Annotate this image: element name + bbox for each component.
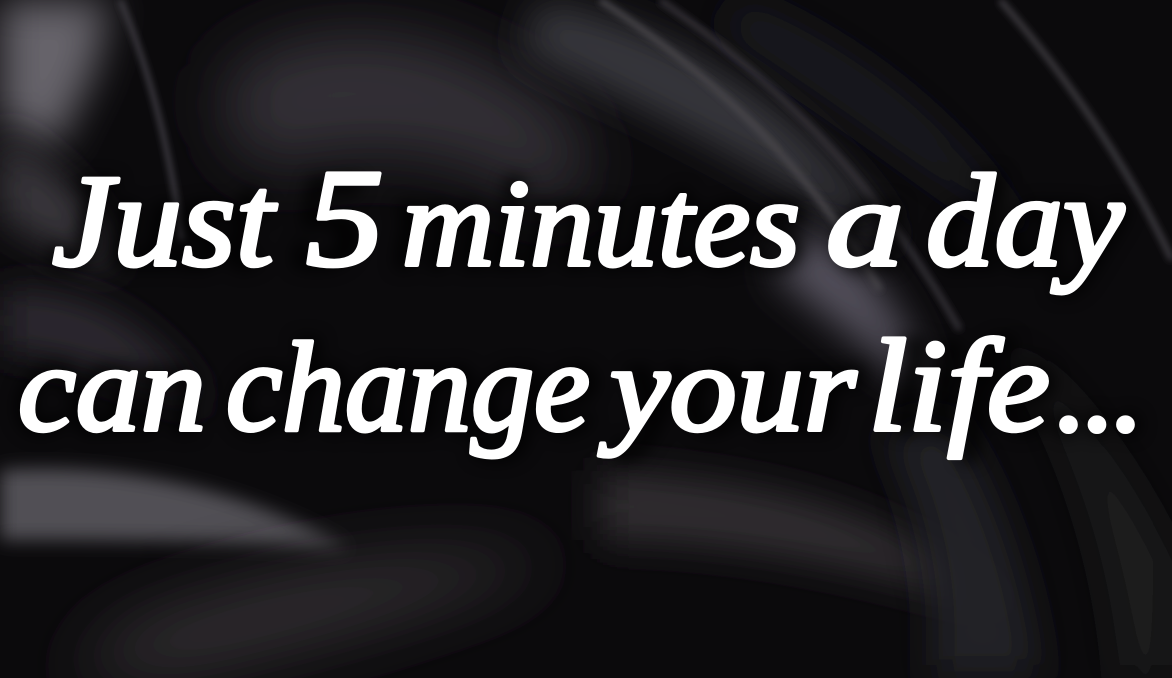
headline: script quote bbox=[16, 141, 1148, 459]
headline line 2: life bbox=[868, 312, 1050, 459]
headline line 2 bbox=[18, 312, 1148, 459]
headline line 2: change bbox=[226, 316, 590, 458]
headline line 1: Just bbox=[52, 147, 277, 294]
headline line 2: ... bbox=[1056, 320, 1148, 457]
headline shadow: Just 5 minutes a day bbox=[50, 151, 1125, 293]
headline line 1: 5 bbox=[306, 141, 384, 296]
headline shadow bbox=[16, 151, 1148, 458]
headline line 1 bbox=[52, 141, 1124, 296]
headline line 1: minutes bbox=[402, 155, 800, 292]
headline line 2: can bbox=[18, 320, 206, 457]
headline line 2: your bbox=[598, 320, 857, 457]
headline line 1: a bbox=[826, 155, 904, 292]
headline shadow: can change your life... bbox=[16, 316, 1148, 458]
headline line 1: day bbox=[926, 147, 1124, 294]
